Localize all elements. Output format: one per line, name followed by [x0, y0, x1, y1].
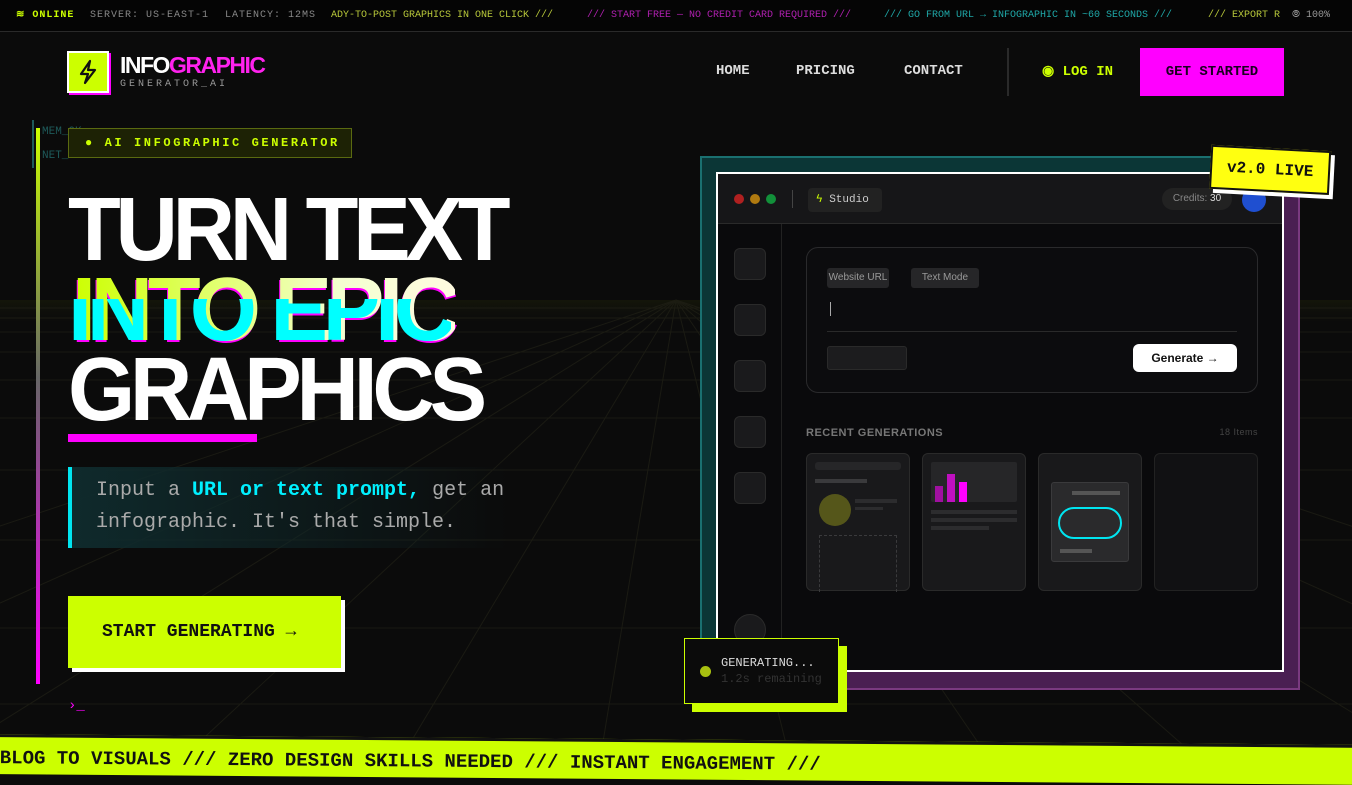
side decorations: NET_SECURE — [42, 150, 108, 162]
card 3 — [1038, 453, 1142, 591]
side decorations: MEM_OK — [42, 126, 82, 138]
top status bar: /// GO FROM URL → INFOGRAPHIC IN ~60 SECONDS /// — [884, 10, 1172, 21]
badge: v2.0 live: v2.0 LIVE — [1226, 159, 1314, 181]
input panel: Text Mode — [922, 272, 968, 283]
button: start generating: START GENERATING → — [102, 622, 296, 642]
glitch line: INTO EPIC — [68, 260, 451, 360]
logo text: INFOGRAPHIC — [120, 52, 265, 78]
headline: TURN TEXT — [68, 180, 505, 280]
prompt cursor: ›_ — [68, 698, 85, 714]
bottom ticker — [0, 734, 1352, 785]
top status bar: /// START FREE — NO CREDIT CARD REQUIRED /// — [587, 10, 851, 21]
bottom ticker: BLOG TO VISUALS /// ZERO DESIGN SKILLS NEEDED /// INSTANT ENGAGEMENT /// — [0, 747, 821, 776]
generate button: Generate → — [1151, 351, 1219, 365]
button: get started: GET STARTED — [1166, 64, 1258, 80]
top status bar: ADY-TO-POST GRAPHICS IN ONE CLICK /// — [331, 10, 553, 21]
recent generations: 18 Items — [1219, 427, 1258, 437]
logo: GENERATOR_AI — [120, 79, 228, 90]
glitch line: INTO EPIC — [71, 262, 454, 362]
window header: ϟ Studio — [816, 194, 869, 206]
badge: AI infographic generator — [68, 128, 352, 158]
headline — [68, 180, 510, 442]
generating toast: 1.2s remaining — [721, 672, 822, 686]
window header — [718, 174, 1282, 224]
side decorations — [32, 120, 108, 168]
headline: GRAPHICS — [68, 340, 482, 440]
top status bar: /// EXPORT R — [1208, 10, 1280, 21]
nav — [716, 48, 1284, 96]
recent generations — [806, 427, 1258, 439]
icon: lightning logo — [67, 51, 109, 93]
top status bar: LATENCY: 12MS — [225, 10, 316, 21]
top status bar: ≋ ONLINE — [16, 10, 74, 21]
card 2 — [922, 453, 1026, 591]
top status bar — [0, 0, 1352, 32]
card 4 — [1154, 453, 1258, 591]
logo — [67, 51, 266, 95]
nav: CONTACT — [904, 63, 963, 79]
glitch line: INTO EPIC — [72, 260, 455, 360]
subtitle: Input a URL or text prompt, get an infographic. It's that simple. — [96, 479, 504, 534]
generate button — [1133, 344, 1237, 372]
button: start generating — [68, 596, 345, 672]
sidebar — [718, 224, 782, 674]
nav: PRICING — [796, 63, 855, 79]
top status bar: ⦾ 100% — [1292, 10, 1330, 21]
subtitle — [68, 467, 508, 548]
recent generations: RECENT GENERATIONS — [806, 427, 943, 439]
badge: AI infographic generator: ● AI INFOGRAPHIC GENERATOR — [85, 136, 340, 150]
generating toast — [684, 638, 847, 712]
window header: Credits: 30 — [1173, 193, 1221, 204]
button: get started — [1140, 48, 1284, 96]
generating toast: GENERATING... — [721, 656, 815, 670]
nav: HOME — [716, 63, 750, 79]
badge: v2.0 live — [1209, 144, 1335, 200]
login: ◉ LOG IN — [1042, 64, 1113, 80]
mockup — [700, 144, 1335, 690]
input panel: Website URL — [829, 272, 887, 283]
app window — [716, 172, 1284, 672]
top status bar: SERVER: US-EAST-1 — [90, 10, 209, 21]
input panel — [806, 247, 1258, 393]
card 1 — [806, 453, 910, 591]
